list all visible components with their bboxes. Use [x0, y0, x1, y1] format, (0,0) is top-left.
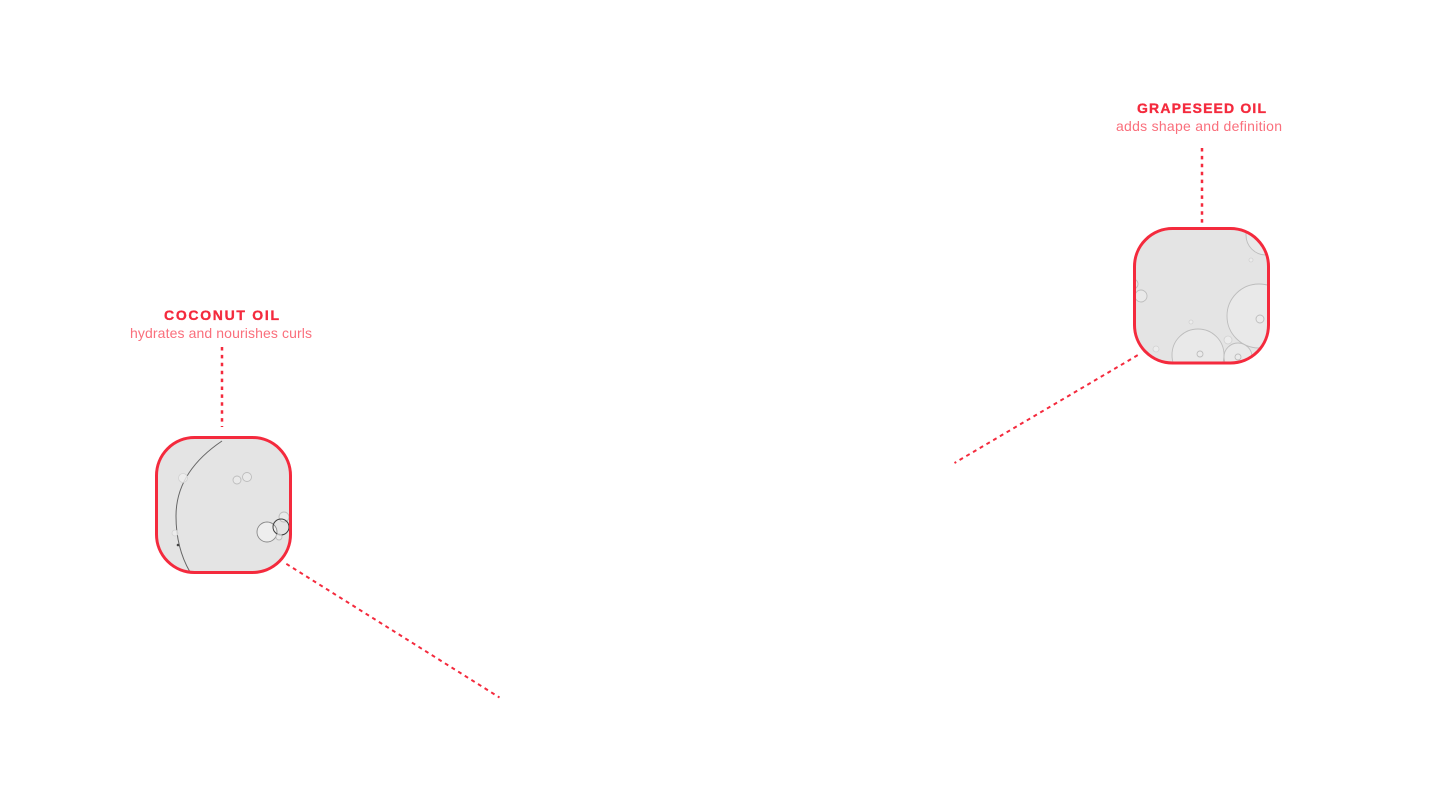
- callout: grapeseed oil: [954, 100, 1291, 463]
- image: coconut oil bubbles: [156, 438, 290, 572]
- text: grapeseed oil benefit: adds shape and definition: [1116, 118, 1282, 134]
- connector: grapeseed image to centre: [954, 355, 1138, 463]
- infographic canvas: [130, 103, 1282, 698]
- image: grapeseed oil bubbles: [1133, 227, 1270, 364]
- text: coconut oil benefit: hydrates and nourishes curls: [130, 325, 312, 341]
- connector: coconut label to image: [221, 347, 223, 427]
- heading: grapeseed oil: GRAPESEED OIL: [1137, 100, 1266, 116]
- connector: coconut image to centre: [285, 563, 500, 698]
- heading: coconut oil: COCONUT OIL: [164, 307, 279, 323]
- connector: grapeseed label to image: [1201, 148, 1203, 228]
- callout: coconut oil: [130, 307, 500, 698]
